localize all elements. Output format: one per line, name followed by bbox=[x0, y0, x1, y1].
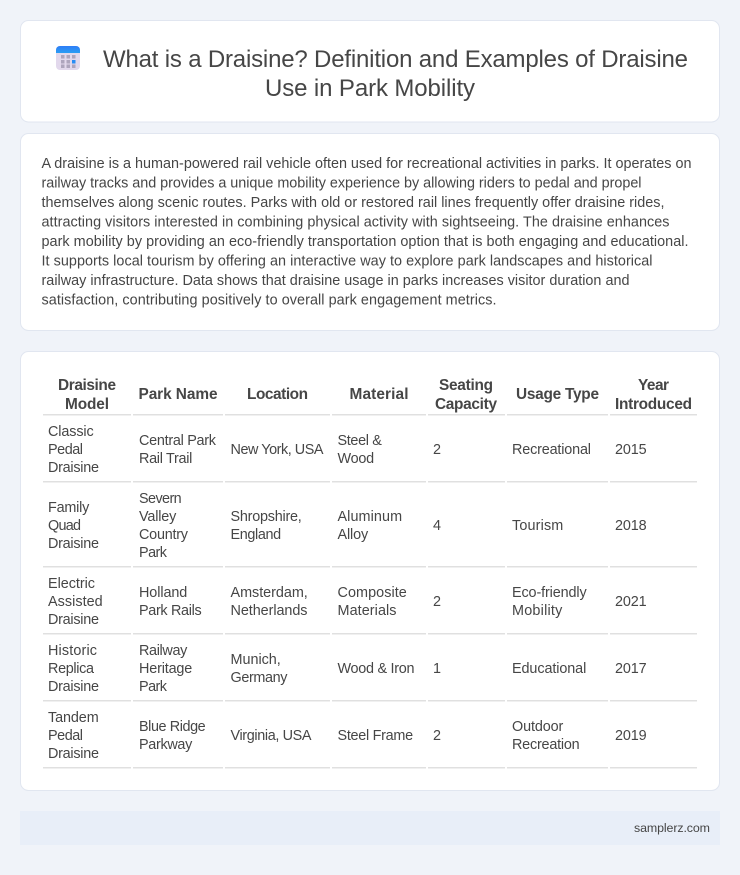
table row: Classic Pedal Draisine: 2 bbox=[433, 442, 441, 458]
table row: Historic Replica Draisine: Replica bbox=[48, 661, 94, 677]
table row: Tandem Pedal Draisine: Tandem bbox=[48, 710, 99, 726]
table row: Family Quad Draisine: 2018 bbox=[615, 518, 647, 534]
table header row: Draisine bbox=[58, 377, 116, 394]
table row: Electric Assisted Draisine bbox=[43, 576, 697, 634]
table row: Electric Assisted Draisine: Draisine bbox=[48, 612, 99, 628]
title: What is a Draisine? Definition and Examples of Draisine bbox=[103, 46, 688, 73]
table row: Tandem Pedal Draisine: Pedal bbox=[48, 728, 83, 744]
table row: Tandem Pedal Draisine: Draisine bbox=[48, 746, 99, 762]
text block: definition paragraph bbox=[42, 156, 692, 308]
table row: Classic Pedal Draisine: Classic bbox=[48, 424, 94, 440]
table row: Family Quad Draisine bbox=[43, 491, 697, 568]
text block: definition paragraph: park mobility by providing an eco-friendly transportation option that is both engaging and educational. bbox=[42, 234, 688, 250]
table row: Historic Replica Draisine: Munich, bbox=[230, 652, 281, 668]
table row: Historic Replica Draisine bbox=[43, 643, 697, 702]
table header row: Usage Type bbox=[516, 386, 599, 403]
table header row: Year bbox=[638, 377, 669, 394]
table row: Classic Pedal Draisine: New York, USA bbox=[230, 442, 324, 458]
table row: Electric Assisted Draisine: Holland bbox=[139, 585, 187, 601]
table row: Classic Pedal Draisine: Central Park bbox=[139, 433, 217, 449]
table row: Electric Assisted Draisine: Electric bbox=[48, 576, 95, 592]
table row: Family Quad Draisine: Tourism bbox=[512, 518, 563, 534]
table row: Tandem Pedal Draisine: 2019 bbox=[615, 728, 647, 744]
table row: Family Quad Draisine: Valley bbox=[139, 509, 177, 525]
table row: Family Quad Draisine: Alloy bbox=[338, 527, 369, 543]
table row: Classic Pedal Draisine bbox=[43, 424, 697, 482]
text block: definition paragraph: It supports local tourism by offering an interactive way to explore park landscapes and historical bbox=[42, 254, 652, 270]
panel: definition bbox=[20, 134, 720, 330]
table row: Historic Replica Draisine: Wood & Iron bbox=[338, 661, 414, 677]
table header row: Seating bbox=[439, 377, 493, 394]
table header row: Model bbox=[65, 396, 109, 413]
table row: Family Quad Draisine: Shropshire, bbox=[230, 509, 302, 525]
table row: Tandem Pedal Draisine: 2 bbox=[433, 728, 441, 744]
table row: Family Quad Draisine: Family bbox=[48, 500, 90, 516]
footer bbox=[20, 811, 720, 845]
table row: Classic Pedal Draisine: Pedal bbox=[48, 442, 83, 458]
table row: Electric Assisted Draisine: Amsterdam, bbox=[230, 585, 308, 601]
table row: Tandem Pedal Draisine: Virginia, USA bbox=[230, 728, 312, 744]
panel: header bbox=[20, 20, 720, 122]
table row: Tandem Pedal Draisine: Parkway bbox=[139, 737, 193, 753]
table row: Historic Replica Draisine: 1 bbox=[433, 661, 441, 677]
table header row bbox=[43, 377, 697, 416]
text block: definition paragraph: attracting visitors interested in combining physical activity with sightseeing. The draisine enhances bbox=[42, 214, 670, 230]
table row: Tandem Pedal Draisine: Steel Frame bbox=[338, 728, 413, 744]
text block: definition paragraph: railway infrastructure. Data shows that draisine usage in parks increases visitor duration and bbox=[42, 273, 630, 289]
table row: Classic Pedal Draisine: Wood bbox=[338, 451, 374, 467]
text block: definition paragraph: themselves along scenic routes. Parks with old or restored rail lines frequently offer draisine rides, bbox=[42, 195, 664, 211]
table row: Electric Assisted Draisine: Materials bbox=[338, 603, 396, 619]
table row: Historic Replica Draisine: Park bbox=[139, 679, 168, 695]
panel: table bbox=[20, 352, 720, 790]
table row: Electric Assisted Draisine: Mobility bbox=[512, 603, 563, 619]
table row: Classic Pedal Draisine: Steel & bbox=[338, 433, 382, 449]
title: Use in Park Mobility bbox=[265, 75, 475, 102]
table row: Historic Replica Draisine: Heritage bbox=[139, 661, 192, 677]
table row: Tandem Pedal Draisine bbox=[43, 710, 697, 768]
table row: Electric Assisted Draisine: 2 bbox=[433, 594, 441, 610]
table header row: Location bbox=[247, 386, 308, 403]
table row: Family Quad Draisine: Aluminum bbox=[338, 509, 402, 525]
table row: Family Quad Draisine: Quad bbox=[48, 518, 81, 534]
table row: Tandem Pedal Draisine: Recreation bbox=[512, 737, 580, 753]
text block: definition paragraph: A draisine is a human-powered rail vehicle often used for recreational activities in parks. It operates on bbox=[42, 156, 692, 172]
title bbox=[103, 46, 688, 102]
table row: Historic Replica Draisine: Historic bbox=[48, 643, 97, 659]
table row: Family Quad Draisine: Severn bbox=[139, 491, 182, 507]
table row: Classic Pedal Draisine: 2015 bbox=[615, 442, 647, 458]
table row: Electric Assisted Draisine: Netherlands bbox=[230, 603, 308, 619]
text block: definition paragraph: railway tracks and provides a unique mobility experience by allowing riders to pedal and propel bbox=[42, 176, 642, 192]
icon: calendar bbox=[56, 46, 80, 70]
table row: Classic Pedal Draisine: Rail Trail bbox=[139, 451, 192, 467]
table row: Family Quad Draisine: Park bbox=[139, 545, 168, 561]
table row: Historic Replica Draisine: Railway bbox=[139, 643, 188, 659]
table row: Electric Assisted Draisine: Assisted bbox=[48, 594, 103, 610]
table row: Historic Replica Draisine: Draisine bbox=[48, 679, 99, 695]
table row: Tandem Pedal Draisine: Outdoor bbox=[512, 719, 564, 735]
table row: Classic Pedal Draisine: Recreational bbox=[512, 442, 591, 458]
table header row: Material bbox=[350, 386, 408, 403]
footer source text: samplerz.com bbox=[634, 821, 710, 835]
table header row: Introduced bbox=[615, 396, 692, 413]
table row: Electric Assisted Draisine: 2021 bbox=[615, 594, 647, 610]
table row: Electric Assisted Draisine: Composite bbox=[338, 585, 407, 601]
table header row: Capacity bbox=[435, 396, 497, 413]
table row: Tandem Pedal Draisine: Blue Ridge bbox=[139, 719, 206, 735]
table header row: Park Name bbox=[138, 386, 218, 403]
table row: Historic Replica Draisine: 2017 bbox=[615, 661, 647, 677]
table row: Classic Pedal Draisine: Draisine bbox=[48, 460, 99, 476]
table row: Electric Assisted Draisine: Park Rails bbox=[139, 603, 202, 619]
table row: Family Quad Draisine: England bbox=[230, 527, 281, 543]
text block: definition paragraph: satisfaction, contributing positively to overall park engagement metrics. bbox=[42, 292, 496, 308]
table row: Family Quad Draisine: Country bbox=[139, 527, 189, 543]
table row: Historic Replica Draisine: Germany bbox=[230, 670, 288, 686]
table row: Family Quad Draisine: 4 bbox=[433, 518, 441, 534]
table row: Family Quad Draisine: Draisine bbox=[48, 536, 99, 552]
table row: Historic Replica Draisine: Educational bbox=[512, 661, 586, 677]
table row: Electric Assisted Draisine: Eco-friendly bbox=[512, 585, 587, 601]
